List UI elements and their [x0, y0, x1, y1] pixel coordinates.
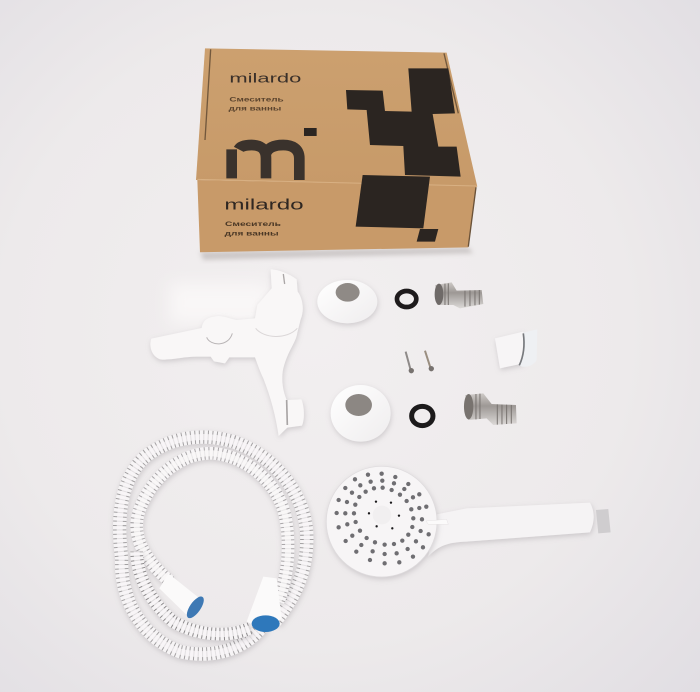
lower rubber washer	[412, 406, 433, 426]
box shadow	[200, 247, 473, 260]
lower escutcheon	[331, 385, 391, 442]
cardboard box	[196, 48, 477, 260]
hose loop 3: lower run	[137, 552, 250, 634]
front product label	[225, 221, 281, 238]
upper escutcheon	[317, 280, 377, 323]
soft highlight behind faucet	[170, 283, 270, 323]
lid brand name: milardo	[229, 70, 301, 85]
box pattern: upper black blocks	[346, 68, 461, 177]
screw left	[406, 352, 411, 370]
box front panel	[197, 180, 477, 252]
shower handle	[428, 503, 594, 557]
front product label: Смеситель	[225, 221, 281, 228]
faucet: switch knob ring	[207, 333, 232, 344]
box lid dark edge lines	[205, 49, 458, 140]
screw right	[425, 351, 431, 368]
shower centre plate	[373, 506, 391, 524]
parts row	[150, 269, 537, 442]
faucet: body collar	[256, 328, 297, 336]
front brand name: milardo	[224, 197, 304, 213]
faucet: main casting	[150, 269, 304, 436]
faucet body	[150, 269, 304, 436]
box front fold highlight	[197, 179, 477, 186]
hose connector: left sleeve	[159, 573, 202, 617]
box pattern: front black block	[356, 175, 430, 228]
hose connector: left blue cap	[184, 594, 207, 621]
shower chrome thread	[596, 509, 611, 533]
lid product label	[229, 97, 284, 112]
hose connector: right sleeve	[247, 577, 282, 632]
shower side tab	[426, 519, 448, 524]
box right flap shadow	[468, 187, 476, 247]
hose loop 2: inner	[137, 453, 288, 602]
faucet: lever slot	[283, 274, 285, 284]
hose loop 1: outer	[120, 437, 307, 654]
front product label: для ванны	[225, 231, 279, 238]
flexible shower hose	[120, 437, 307, 654]
upper chrome adapter	[435, 282, 483, 308]
hose connector: right blue cap	[252, 615, 280, 632]
hand shower	[326, 466, 611, 577]
box logo mark: dot	[304, 128, 317, 136]
box lid	[196, 48, 477, 187]
screw heads	[409, 366, 434, 373]
shower spray holes	[334, 471, 431, 565]
upper rubber washer	[397, 291, 416, 307]
lower chrome adapter	[464, 393, 517, 425]
lid product label: Смеситель	[229, 97, 284, 104]
faucet: wall connector edge	[284, 400, 290, 425]
box logo mark: large m	[232, 145, 299, 180]
shower holder	[495, 329, 537, 368]
box pattern: small square	[417, 229, 438, 242]
lid product label: для ванны	[229, 105, 281, 112]
shower centre nozzles	[368, 500, 400, 529]
shower head disc	[326, 466, 437, 577]
